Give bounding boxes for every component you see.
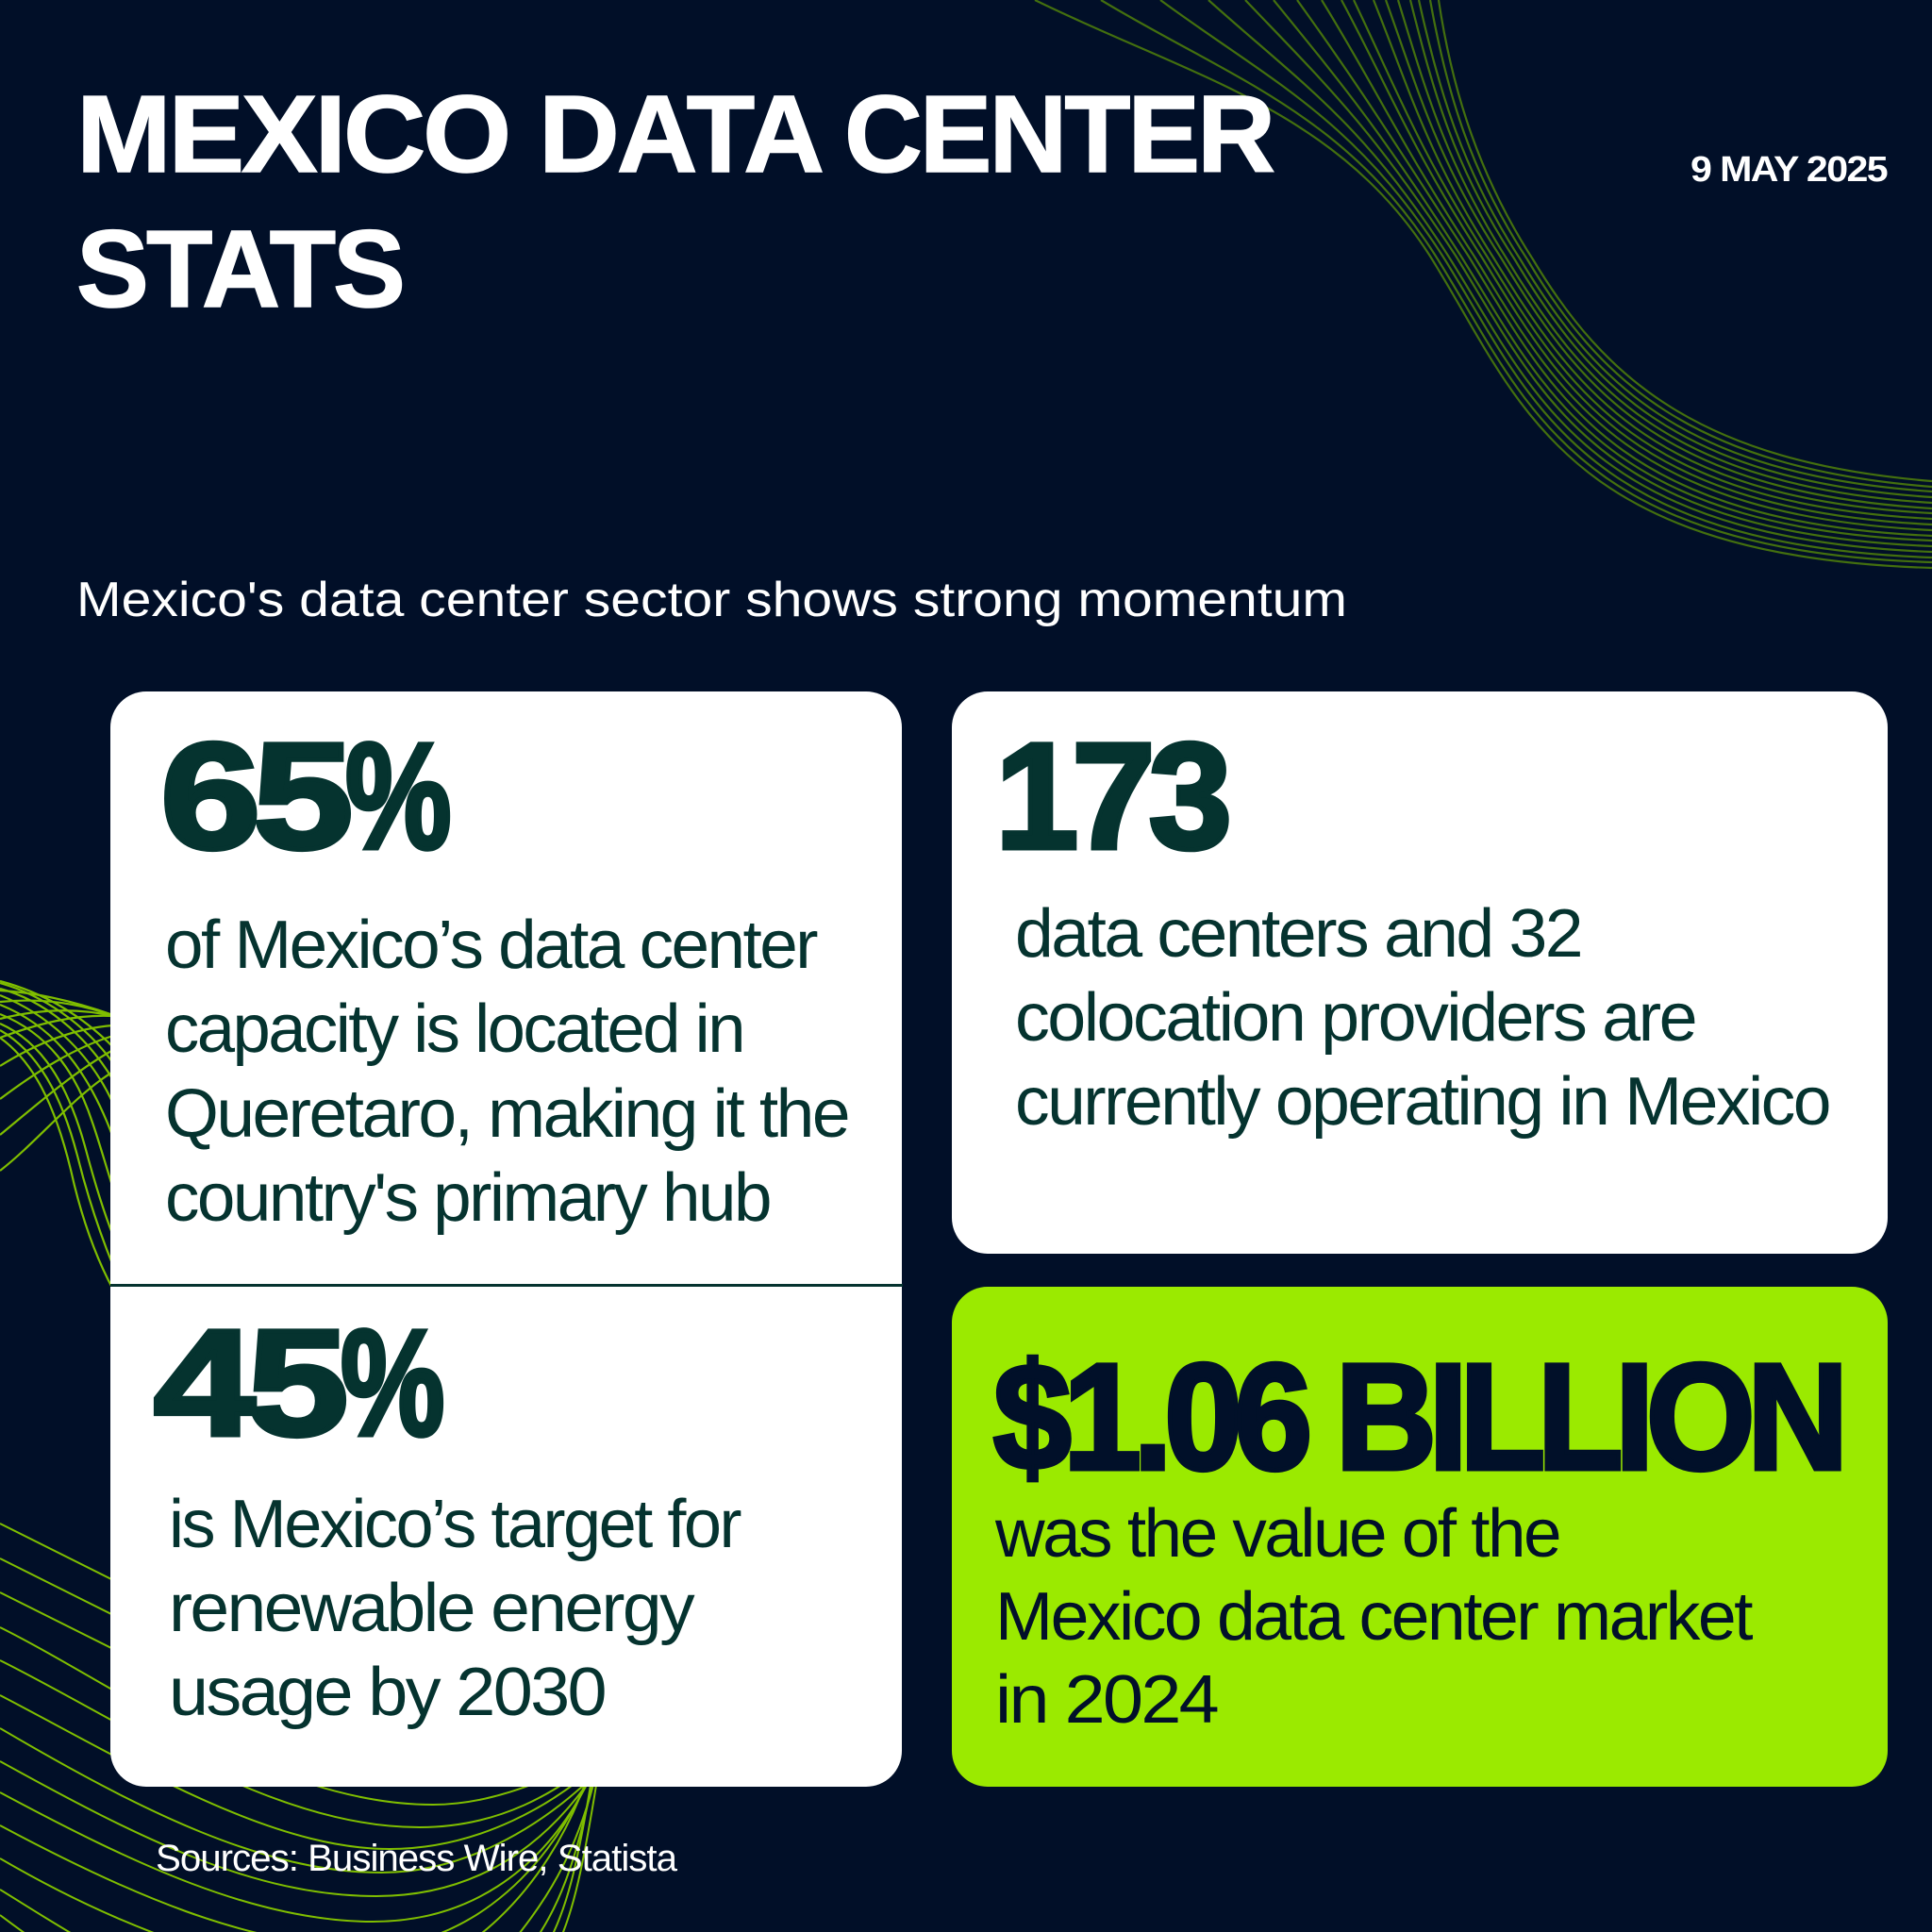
text: renewable target: is Mexico’s target for <box>169 1487 741 1562</box>
stat: 45% <box>154 1298 442 1467</box>
text: renewable target: usage by 2030 <box>169 1655 605 1730</box>
text: Queretaro capacity: Queretaro, making it the <box>165 1076 848 1152</box>
stat: 173: 173 <box>995 711 1227 880</box>
stat: $1.06 billion: $1.06 BILLION <box>993 1332 1840 1501</box>
title: DATA <box>539 73 822 195</box>
title: CENTER <box>844 73 1274 195</box>
stat: 65%: 65 <box>160 711 349 880</box>
decorative wave lines: top right <box>1035 0 1932 568</box>
text: renewable target <box>169 1487 741 1730</box>
text: data centers and providers: data centers and 32 <box>1015 896 1581 972</box>
title: STATS <box>76 208 403 330</box>
subtitle: Mexico's data center sector shows strong momentum <box>76 573 1347 627</box>
text: renewable target: renewable energy <box>169 1571 695 1646</box>
stat: 65%: % <box>345 711 449 880</box>
panel: green market value card <box>952 1287 1888 1787</box>
stat: 45%: 45 <box>154 1298 344 1467</box>
text: Queretaro capacity: country's primary hub <box>165 1160 770 1236</box>
text: data centers and providers <box>1015 896 1829 1140</box>
date: 9 MAY 2025 <box>1690 150 1888 190</box>
decorative wave lines: left middle <box>0 981 113 1290</box>
text: Queretaro capacity: of Mexico’s data center <box>165 908 818 983</box>
text: market value: in 2024 <box>995 1662 1217 1738</box>
text: Queretaro capacity: capacity is located in <box>165 991 743 1067</box>
text: market value <box>994 1496 1754 1738</box>
decorative wave lines: bottom left <box>0 1524 604 1932</box>
title: MEXICO <box>76 73 508 195</box>
sources: Sources: Business Wire, Statista <box>156 1838 678 1879</box>
text: market value: Mexico data center market <box>995 1579 1754 1655</box>
stat: 45%: % <box>341 1298 442 1467</box>
panel: top right white card <box>952 691 1888 1254</box>
text: data centers and providers: colocation providers are <box>1015 980 1695 1056</box>
text: market value: was the value of the <box>994 1496 1559 1572</box>
stat: 65% <box>160 711 449 880</box>
panel: left white card <box>110 691 903 1787</box>
text: data centers and providers: currently operating in Mexico <box>1015 1064 1829 1140</box>
text: Queretaro capacity <box>165 908 848 1236</box>
title <box>76 73 1274 330</box>
